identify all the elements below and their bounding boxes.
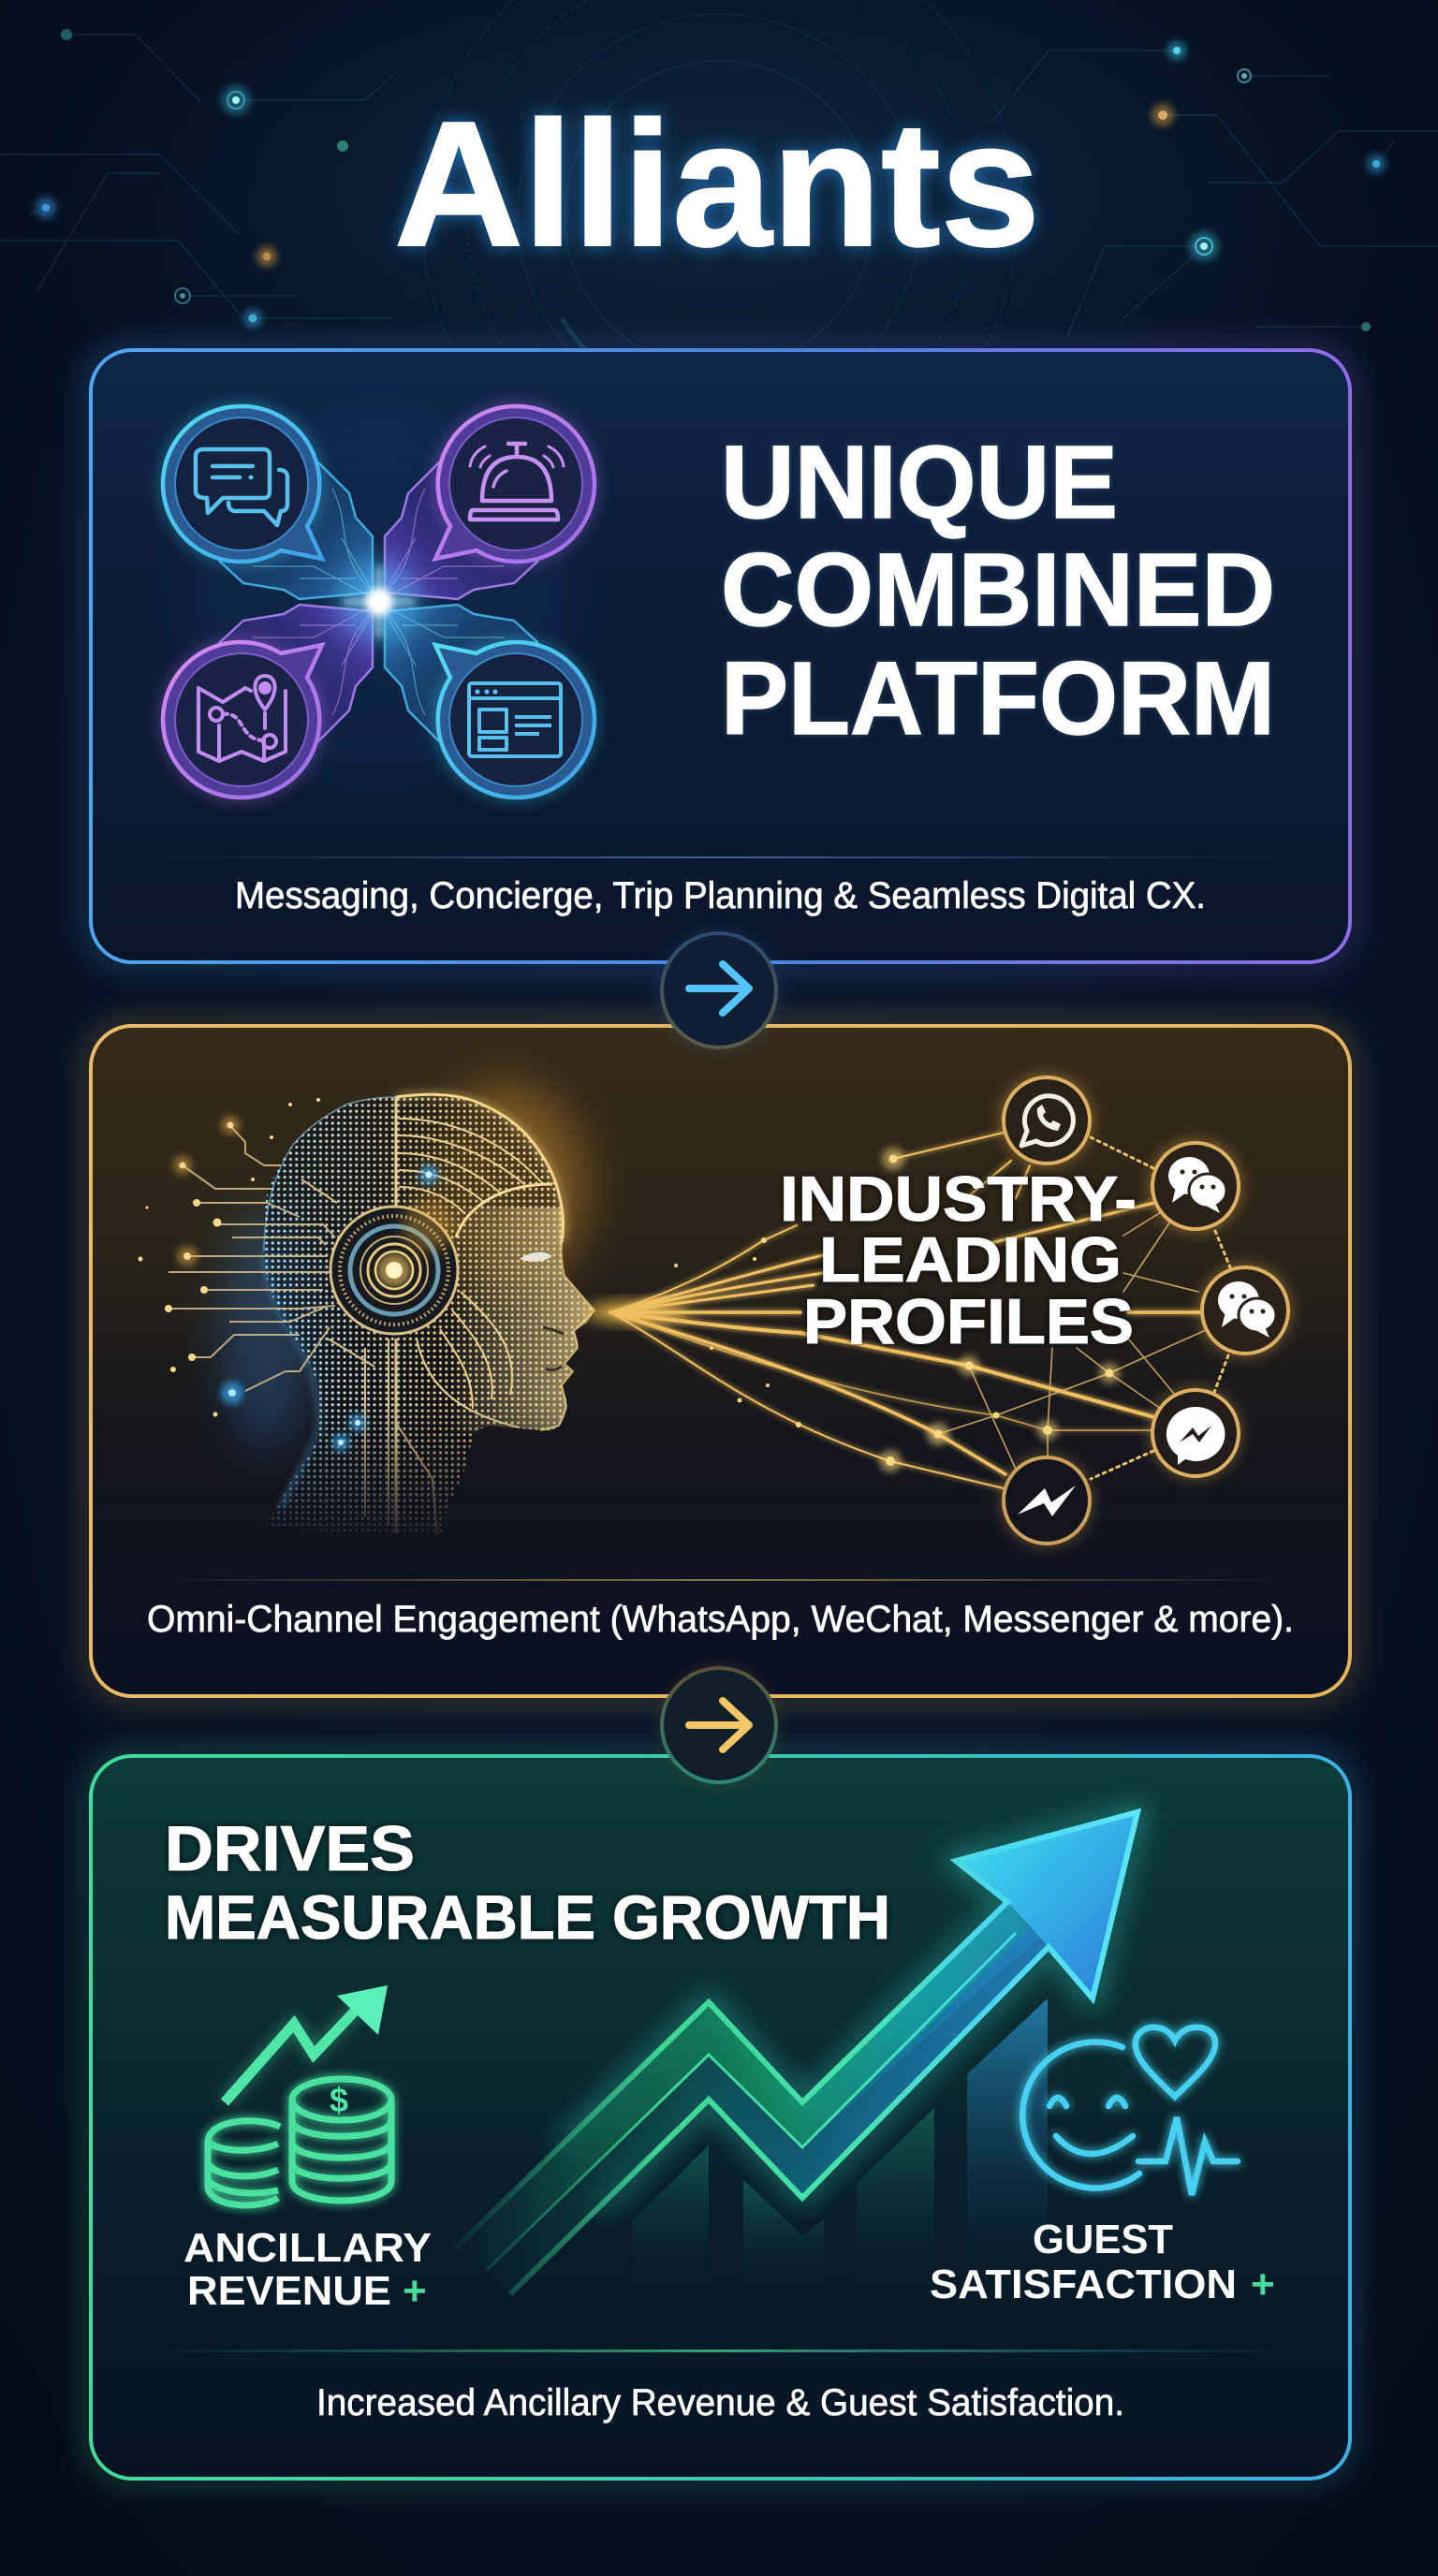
growth arrow chart xyxy=(456,1812,1137,2294)
arrow upper band xyxy=(456,1902,1039,2270)
icon: WeChat second xyxy=(1200,1266,1290,1355)
label: guest satisfaction: SATISFACTION xyxy=(930,2261,1237,2307)
panel 3 box xyxy=(89,1754,1352,2481)
light rays xyxy=(585,1133,1230,1488)
icon: Messenger xyxy=(1151,1388,1240,1478)
icon: WhatsApp xyxy=(1002,1076,1092,1165)
panel heading: UNIQUE xyxy=(721,425,1118,540)
panel heading: MEASURABLE GROWTH xyxy=(165,1882,890,1952)
platform diagram with four icons xyxy=(159,402,598,802)
icon: WeChat xyxy=(1151,1141,1240,1231)
head silhouette xyxy=(264,1096,594,1535)
panel heading: COMBINED xyxy=(721,533,1275,648)
panel 2 box xyxy=(89,1024,1352,1698)
icon: coin stacks: $ xyxy=(330,2081,348,2119)
label: ancillary revenue: ANCILLARY xyxy=(183,2225,432,2271)
label: ancillary revenue: REVENUE xyxy=(187,2268,391,2314)
panel heading: PLATFORM xyxy=(721,641,1275,756)
panel heading xyxy=(780,1164,1137,1357)
icon: trip planning map xyxy=(159,637,324,802)
label: ancillary revenue: + xyxy=(403,2268,427,2314)
ear target xyxy=(330,1207,458,1334)
panel: unique combined platform xyxy=(89,348,1352,964)
icon: revenue arrow xyxy=(225,1985,388,2102)
background network nodes xyxy=(36,29,1386,331)
panel heading xyxy=(721,425,1275,756)
label: guest satisfaction: + xyxy=(1251,2261,1275,2307)
label: ancillary revenue xyxy=(183,2225,432,2314)
caption: Increased Ancillary Revenue & Guest Satisfaction. xyxy=(316,2382,1124,2423)
background bars xyxy=(632,1998,1048,2284)
arrow lower band xyxy=(487,1919,1049,2294)
icon: concierge bell xyxy=(433,402,598,566)
panel: industry-leading profiles xyxy=(89,1024,1352,1698)
circuit lines and nodes xyxy=(169,1125,335,1391)
panel: drives measurable growth xyxy=(89,1754,1352,2481)
icon: guest satisfaction xyxy=(1022,2027,1238,2195)
panel heading: DRIVES xyxy=(165,1813,415,1884)
panel 1 box xyxy=(89,348,1352,964)
label: guest satisfaction: GUEST xyxy=(1033,2217,1173,2262)
arrow connector two xyxy=(661,1667,777,1783)
panel heading: PROFILES xyxy=(803,1286,1134,1357)
AI head xyxy=(139,1086,609,1544)
icon: messaging xyxy=(159,402,324,566)
network nodes xyxy=(674,1148,1120,1472)
arrow connector one xyxy=(661,932,777,1048)
icon: digital window xyxy=(433,637,598,802)
panel heading: LEADING xyxy=(819,1224,1122,1295)
title: Alliants xyxy=(394,85,1040,284)
panel heading xyxy=(165,1813,890,1952)
decorative circuit background xyxy=(0,0,1438,513)
icon: coin stacks xyxy=(208,2079,391,2205)
icon: lightning xyxy=(1002,1456,1092,1545)
caption: Messaging, Concierge, Trip Planning & Seamless Digital CX. xyxy=(235,875,1206,916)
caption: Omni-Channel Engagement (WhatsApp, WeChat, Messenger & more). xyxy=(147,1599,1294,1640)
label: guest satisfaction xyxy=(930,2217,1275,2307)
circuit lobes xyxy=(220,463,537,740)
central light burst xyxy=(340,563,418,641)
panel heading: INDUSTRY- xyxy=(780,1164,1137,1235)
